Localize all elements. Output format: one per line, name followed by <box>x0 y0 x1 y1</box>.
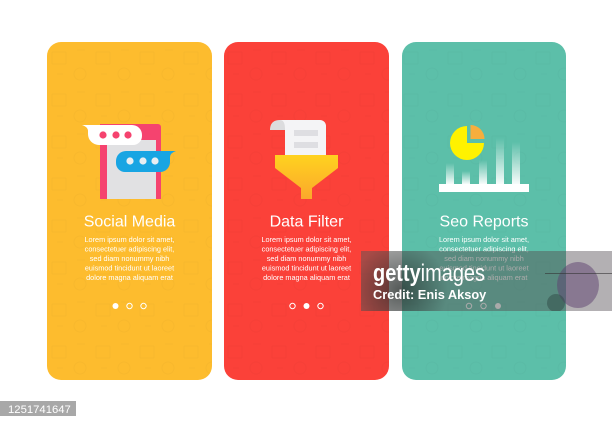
icon: data filter funnel and paper <box>270 120 338 199</box>
heading: social media: Social Media <box>84 214 175 230</box>
icon: social media phone and chat bubbles <box>82 124 176 199</box>
panel: social media <box>47 42 212 380</box>
text block: seo reports body: sed diam nonummy nibh <box>444 254 524 263</box>
text block: social media body: sed diam nonummy nibh <box>90 254 169 263</box>
watermark: gettyimages credit: gettyimages <box>373 260 485 287</box>
text block: data filter body: sed diam nonummy nibh <box>267 254 346 263</box>
icon: seo reports chart <box>439 125 529 192</box>
text block: data filter body: Lorem ipsum dolor sit amet, <box>261 235 352 244</box>
watermark: gettyimages credit: Credit: Enis Aksoy <box>373 287 487 302</box>
text block: social media body: dolore magna aliquam erat <box>86 273 173 282</box>
watermark: gettyimages credit <box>361 251 612 311</box>
pagination dots: data filter <box>290 303 323 309</box>
image id label <box>0 401 76 416</box>
panel: data filter <box>224 42 389 380</box>
image id label: 1251741647 <box>8 404 71 416</box>
pagination dots: seo reports <box>466 303 501 309</box>
text block: data filter body: consectetuer adipiscing elit, <box>262 244 351 254</box>
text block: seo reports body <box>439 235 529 282</box>
text block: data filter body: euismod tincidunt ut laoreet <box>262 264 351 272</box>
panel: seo reports <box>402 42 566 380</box>
text block: seo reports body: Lorem ipsum dolor sit amet, <box>439 235 529 244</box>
text block: seo reports body: euismod tincidunt ut laoreet <box>439 264 529 272</box>
text block: social media body: consectetuer adipiscing elit, <box>85 244 174 254</box>
text block: social media body <box>84 235 175 282</box>
text block: data filter body <box>261 235 352 282</box>
text block: social media body: Lorem ipsum dolor sit amet, <box>84 235 175 244</box>
pagination dots: social media <box>112 303 146 309</box>
text block: seo reports body: dolore magna aliquam erat <box>441 273 527 282</box>
text block: social media body: euismod tincidunt ut laoreet <box>85 264 174 272</box>
heading: seo reports: Seo Reports <box>440 214 528 230</box>
heading: data filter: Data Filter <box>270 214 344 230</box>
text block: seo reports body: consectetuer adipiscing elit, <box>439 244 529 254</box>
text block: data filter body: dolore magna aliquam erat <box>263 273 350 282</box>
